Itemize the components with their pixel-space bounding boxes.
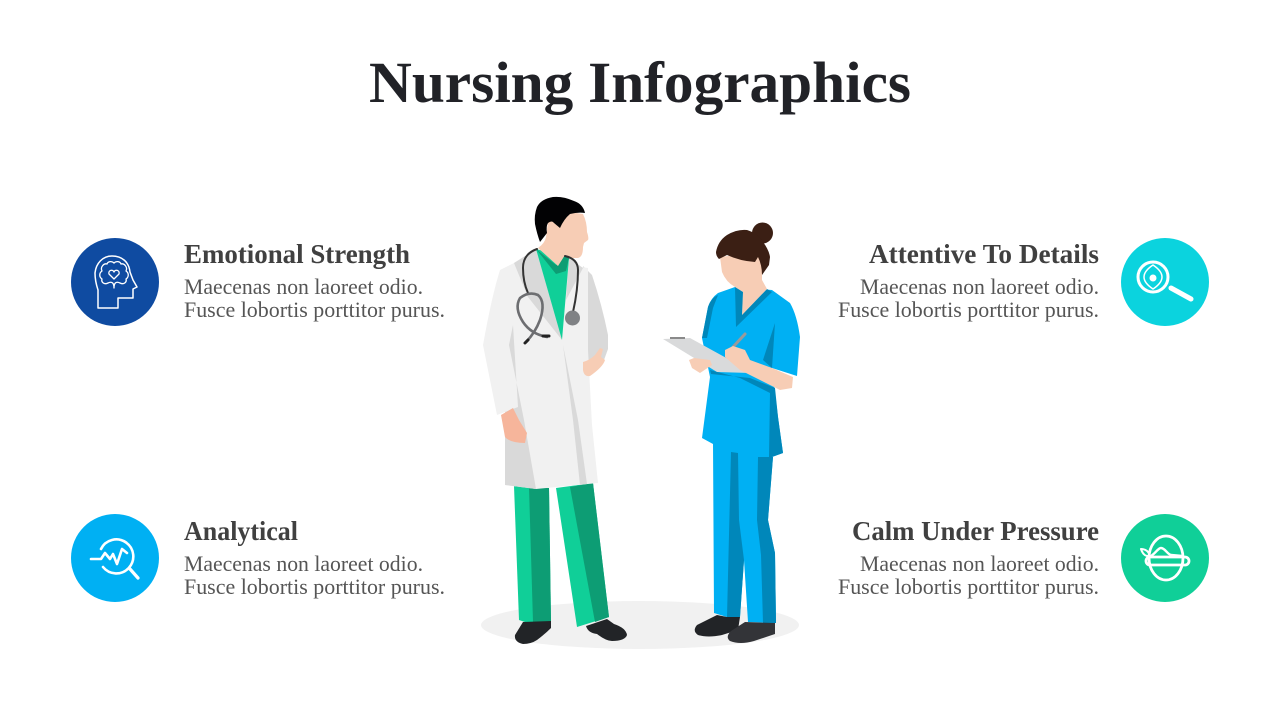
panel: calm under pressure bbox=[838, 514, 1209, 602]
text block: calm under pressure: Maecenas non laoreet odio. bbox=[860, 551, 1099, 576]
title: Nursing Infographics bbox=[369, 50, 911, 115]
clipboard bbox=[663, 338, 750, 373]
doctor face and neck bbox=[538, 212, 588, 266]
nurse scrub top bbox=[702, 287, 800, 457]
doctor coat bbox=[483, 249, 608, 489]
illustration: nurse bbox=[663, 222, 800, 643]
text block: emotional strength: Fusce lobortis porttitor purus. bbox=[184, 297, 445, 322]
panel: analytical bbox=[71, 514, 445, 602]
doctor hands bbox=[501, 348, 605, 443]
nurse trousers bbox=[713, 443, 776, 623]
doctor trousers bbox=[514, 483, 609, 627]
text block: analytical bbox=[184, 551, 445, 599]
icon: head with brain bbox=[71, 238, 159, 326]
pen bbox=[733, 334, 745, 347]
text block: analytical: Fusce lobortis porttitor purus. bbox=[184, 574, 445, 599]
text block: attentive to details: Maecenas non laoreet odio. bbox=[860, 274, 1099, 299]
nurse hair and bun bbox=[716, 222, 773, 275]
nurse arm and hands bbox=[689, 346, 793, 390]
heading: analytical: Analytical bbox=[184, 516, 298, 546]
heading: attentive to details: Attentive To Details bbox=[869, 239, 1099, 269]
nurse shoes bbox=[695, 615, 775, 643]
panel: attentive to details bbox=[838, 238, 1209, 326]
text block: attentive to details: Fusce lobortis porttitor purus. bbox=[838, 297, 1099, 322]
icon: magnifier with pulse line bbox=[71, 514, 159, 602]
illustration: doctor bbox=[483, 197, 627, 644]
text block: calm under pressure bbox=[838, 551, 1099, 599]
text block: attentive to details bbox=[838, 274, 1099, 322]
text block: analytical: Maecenas non laoreet odio. bbox=[184, 551, 423, 576]
text block: emotional strength bbox=[184, 274, 445, 322]
icon: magnifier with eye bbox=[1121, 238, 1209, 326]
text block: emotional strength: Maecenas non laoreet odio. bbox=[184, 274, 423, 299]
doctor shirt and collar bbox=[536, 249, 569, 340]
stethoscope bbox=[518, 249, 580, 343]
text block: calm under pressure: Fusce lobortis porttitor purus. bbox=[838, 574, 1099, 599]
nurse neck and face bbox=[720, 252, 767, 315]
doctor shoes bbox=[515, 619, 627, 644]
heading: calm under pressure: Calm Under Pressure bbox=[852, 516, 1099, 546]
panel: emotional strength bbox=[71, 238, 445, 326]
floor shadow bbox=[481, 601, 799, 649]
heading: emotional strength: Emotional Strength bbox=[184, 239, 410, 269]
icon: calm face with band bbox=[1121, 514, 1209, 602]
doctor hair bbox=[535, 197, 585, 242]
